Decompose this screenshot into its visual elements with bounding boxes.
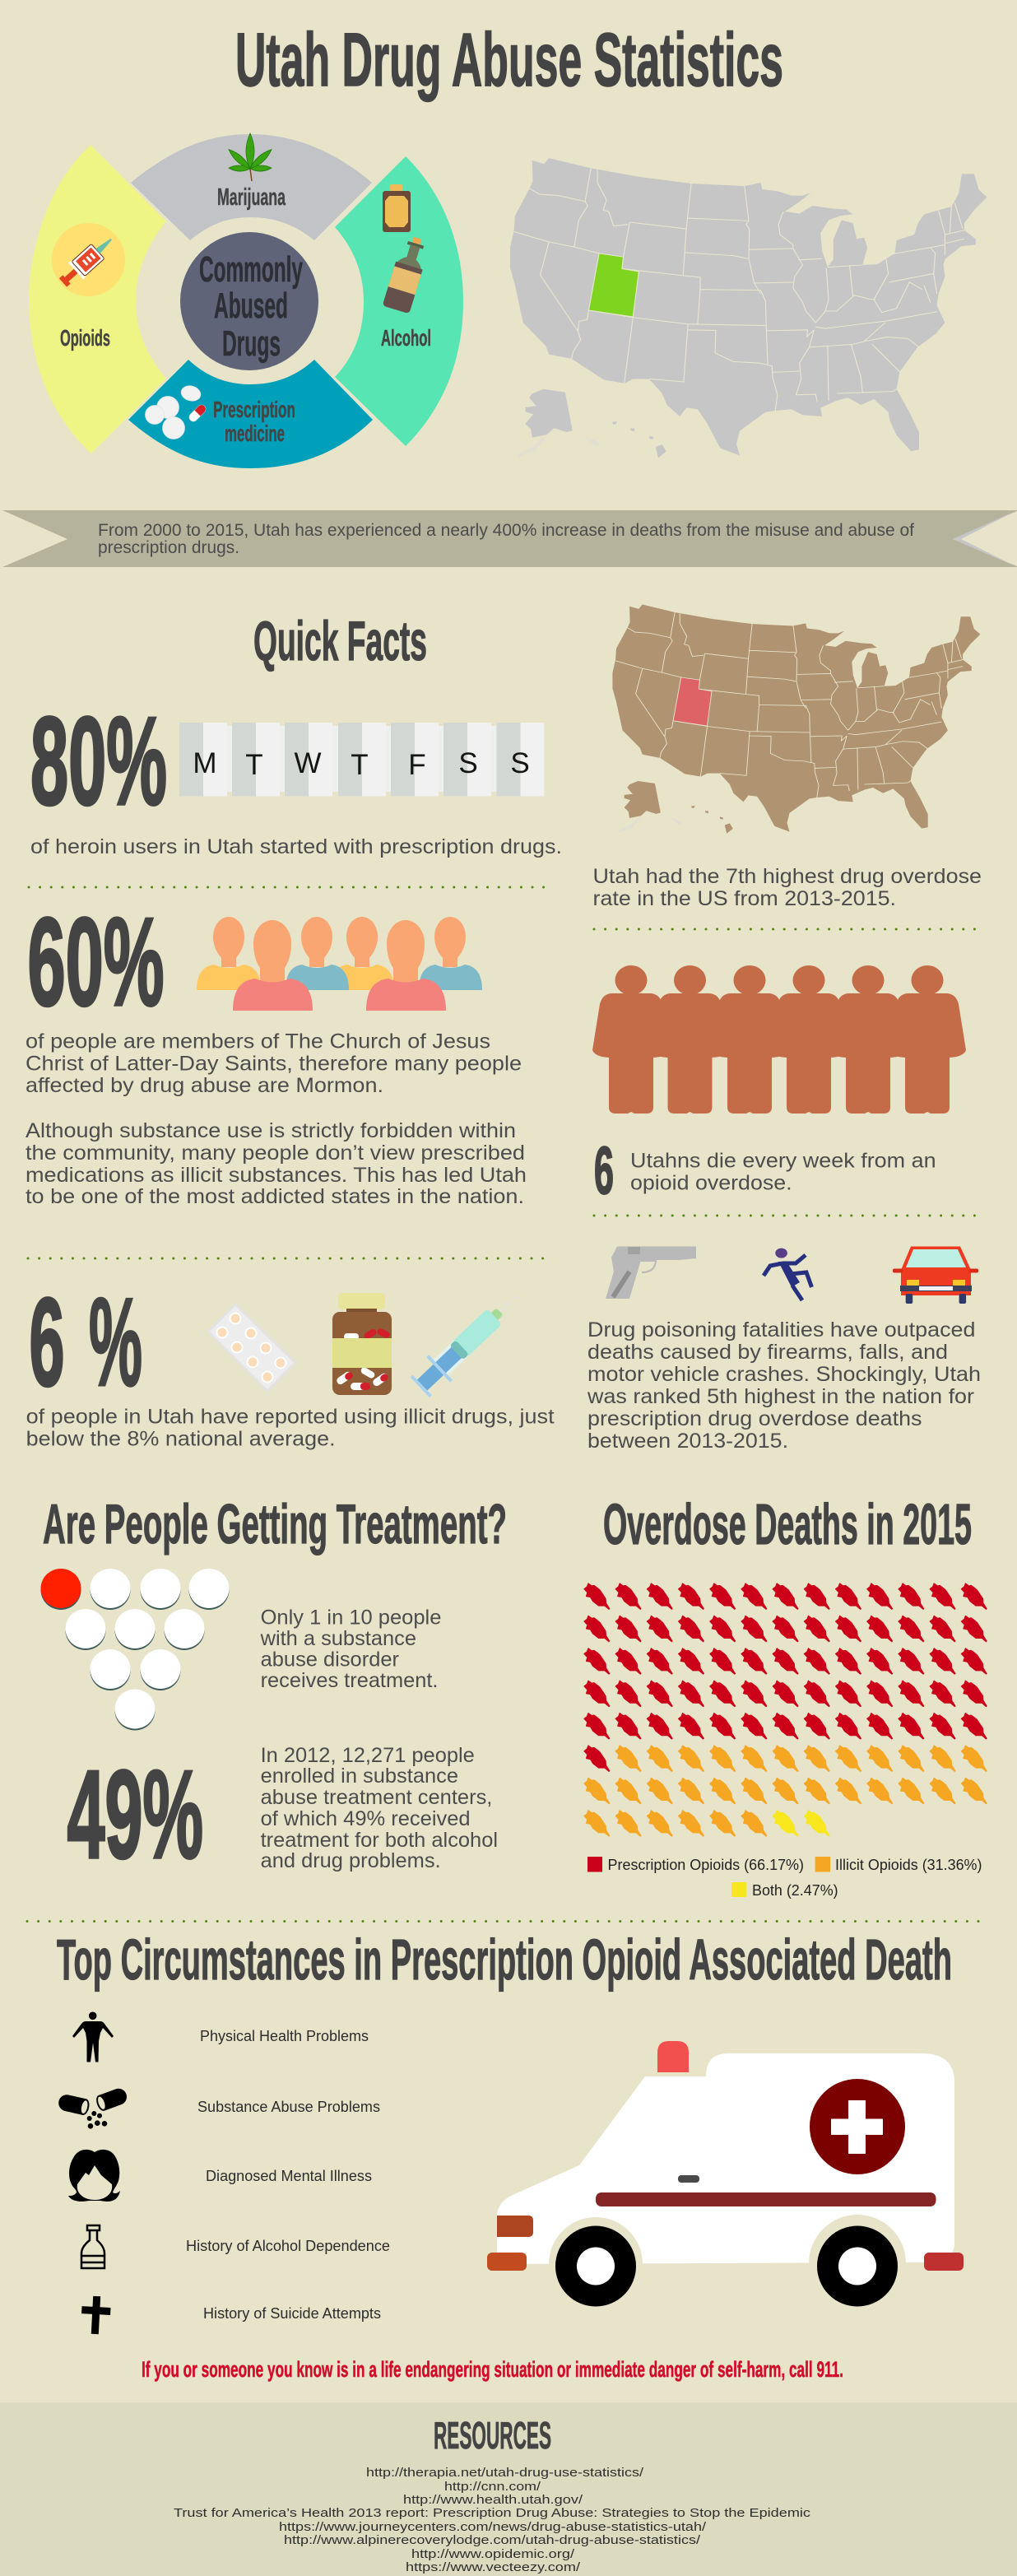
text: 2012 enrollment: and drug problems. [261,1849,441,1872]
text: LDS church paragraphs: of people are members of The Church of Jesus [26,1030,490,1053]
stat: 60%: 60% [28,892,165,1032]
text: poisoning fatalities: prescription drug overdose deaths [587,1407,922,1430]
ambulance [485,2041,971,2312]
chart: syringe pictogram [584,1583,987,1836]
resource list: http://cnn.com/ [444,2480,541,2494]
weekly calendar strip: T [351,749,369,781]
text: illicit drugs [26,1406,555,1451]
weekly calendar strip: F [408,749,426,781]
map: US with Utah highlighted red [612,605,980,834]
icon: cross [81,2295,111,2335]
cross badge [810,2079,905,2174]
center circle: Commonly [199,249,303,290]
icon: open capsule [57,2086,129,2129]
label: marijuana: Marijuana [217,184,286,211]
panel: resources [0,2402,1017,2576]
text: 7th highest [592,865,982,910]
weekly calendar strip: T [245,749,263,781]
icon: handgun [606,1246,696,1299]
icon: pills [145,384,207,439]
rear wheel [817,2225,898,2306]
label: prescription medicine: medicine [225,421,285,446]
text: poisoning fatalities: deaths caused by firearms, falls, and [587,1341,948,1364]
stat: 49%: 49% [67,1745,203,1885]
weekly calendar strip [179,723,545,797]
center circle: Abused [214,286,288,326]
headlight [497,2216,533,2237]
icon: car [893,1246,978,1304]
text: 1 in 10: abuse disorder [261,1648,399,1671]
segment: alcohol [335,156,463,446]
icon: syringe [55,230,119,291]
weekly calendar strip: S [458,747,478,779]
resource list: https://www.journeycenters.com/news/drug-abuse-statistics-utah/ [279,2520,707,2534]
banner text: prescription drugs. [98,538,239,557]
stat: 6% [30,1272,142,1412]
text: suicide attempts: History of Suicide Attempts [203,2305,381,2322]
text: 2012 enrollment: enrolled in substance [261,1765,458,1788]
text: LDS church paragraphs [26,1030,527,1208]
banner [2,510,1017,567]
front bumper [487,2253,527,2271]
icon: blister pack [208,1304,295,1391]
text: illicit drugs: below the 8% national average. [26,1428,336,1451]
text: % [89,1272,142,1412]
text: 7th highest: Utah had the 7th highest drug overdose [592,865,982,888]
text: LDS church paragraphs: to be one of the most addicted states in the nation. [26,1185,524,1208]
text: 1 in 10: receives treatment. [261,1669,438,1692]
weekly calendar strip: S [510,747,530,779]
stripe [596,2192,936,2206]
resource list: Trust for America’s Health 2013 report: Prescription Drug Abuse: Strategies to Stop the Epidemic [174,2506,811,2520]
segment: opioids [29,145,166,453]
resource list: http://www.alpinerecoverylodge.com/utah-drug-abuse-statistics/ [284,2533,701,2547]
text: mental illness: Diagnosed Mental Illness [206,2168,372,2184]
segment: marijuana [131,133,372,240]
stat: 6%: 6 [30,1272,64,1412]
icon: alcohol bottle [81,2225,104,2268]
heading: are people getting treatment: Are People Getting Treatment? [43,1493,507,1555]
text: poisoning fatalities: Drug poisoning fatalities have outpaced [587,1318,976,1341]
icon: human body [72,2011,114,2062]
door handle [678,2175,699,2183]
text: LDS church paragraphs: Although substance use is strictly forbidden within [26,1119,516,1142]
text: LDS church paragraphs: Christ of Latter-Day Saints, therefore many people [26,1053,522,1076]
stat: 6 Utahns [594,1133,936,1208]
wheel arches [549,2215,906,2312]
text: LDS church paragraphs: affected by drug abuse are Mormon. [26,1074,383,1097]
body [497,2053,954,2264]
text: alcohol dependence: History of Alcohol Dependence [186,2238,390,2254]
rear bumper [924,2253,964,2271]
legend: Illicit Opioids (31.36%) [835,1857,982,1873]
text: poisoning fatalities: was ranked 5th highest in the nation for [587,1385,974,1408]
front wheel [555,2225,636,2306]
text: 1 in 10: Only 1 in 10 people [261,1607,441,1630]
label: alcohol: Alcohol [381,325,431,351]
text: 2012 enrollment: of which 49% received [261,1807,471,1830]
text: physical health: Physical Health Problems [200,2028,369,2044]
resource list: https://www.vecteezy.com/ [406,2560,581,2574]
center circle [180,232,318,370]
text: 1 in 10: with a substance [260,1627,416,1650]
text: LDS church paragraphs: the community, many people don’t view prescribed [26,1142,525,1165]
label: opioids: Opioids [60,325,110,351]
weekly calendar strip: W [294,747,322,779]
text: 7th highest: rate in the US from 2013-2015. [592,887,896,910]
resource list [174,2466,811,2574]
text: illicit drugs: of people in Utah have reported using illicit drugs, just [26,1406,555,1429]
icon: group of people [197,917,482,1011]
legend [587,1857,982,1899]
icon: head with hair [68,2150,120,2202]
label: prescription medicine: Prescription [213,397,295,422]
legend: Both (2.47%) [752,1882,838,1899]
icon: bottle [383,234,431,314]
panel: resources: RESOURCES [434,2414,551,2457]
chart: 1 in 10 dots [41,1569,229,1730]
siren [657,2041,689,2072]
stat: 6 Utahns: 6 [594,1133,614,1208]
text: 2012 enrollment: In 2012, 12,271 people [261,1744,475,1767]
text: heroin users: of heroin users in Utah started with prescription drugs. [30,835,562,858]
legend: Prescription Opioids (66.17%) [607,1857,804,1873]
text: substance abuse: Substance Abuse Problems [197,2099,380,2115]
label: prescription medicine [213,397,295,446]
text: poisoning fatalities: between 2013-2015. [587,1430,788,1453]
text: LDS church paragraphs: medications as illicit substances. This has led Utah [26,1164,527,1187]
panel: commonly abused drugs ring [29,133,463,468]
icon: pill jar [332,1293,392,1395]
banner text [98,521,914,557]
map: US with Utah highlighted green [510,158,987,458]
stat: 6 Utahns: opioid overdose. [630,1172,792,1195]
heading: quick facts: Quick Facts [253,610,427,672]
text: 2012 enrollment [261,1744,498,1872]
weekly calendar strip: M [193,747,217,779]
center circle: Drugs [222,323,281,364]
text: poisoning fatalities: motor vehicle crashes. Shockingly, Utah [587,1363,981,1386]
stat: 6 Utahns: Utahns die every week from an [630,1149,936,1172]
icon: cannabis leaf [226,133,274,181]
icon: flask [383,184,411,232]
banner text: From 2000 to 2015, Utah has experienced a nearly 400% increase in deaths from the misuse and abuse of [98,521,914,540]
text: 1 in 10 [260,1607,441,1692]
text: poisoning fatalities [587,1318,981,1453]
resource list: http://www.opidemic.org/ [411,2547,575,2561]
text: 2012 enrollment: abuse treatment centers, [261,1786,492,1809]
segment: prescription medicine [128,360,373,468]
text: 2012 enrollment: treatment for both alcohol [261,1829,498,1852]
resource list: http://therapia.net/utah-drug-use-statistics/ [366,2466,644,2480]
stat: 80%: 80% [30,691,167,831]
icon: six people silhouettes [592,965,966,1114]
icon: syringe [408,1284,528,1400]
resource list: http://www.health.utah.gov/ [403,2493,583,2507]
icon: falling person [764,1248,811,1300]
